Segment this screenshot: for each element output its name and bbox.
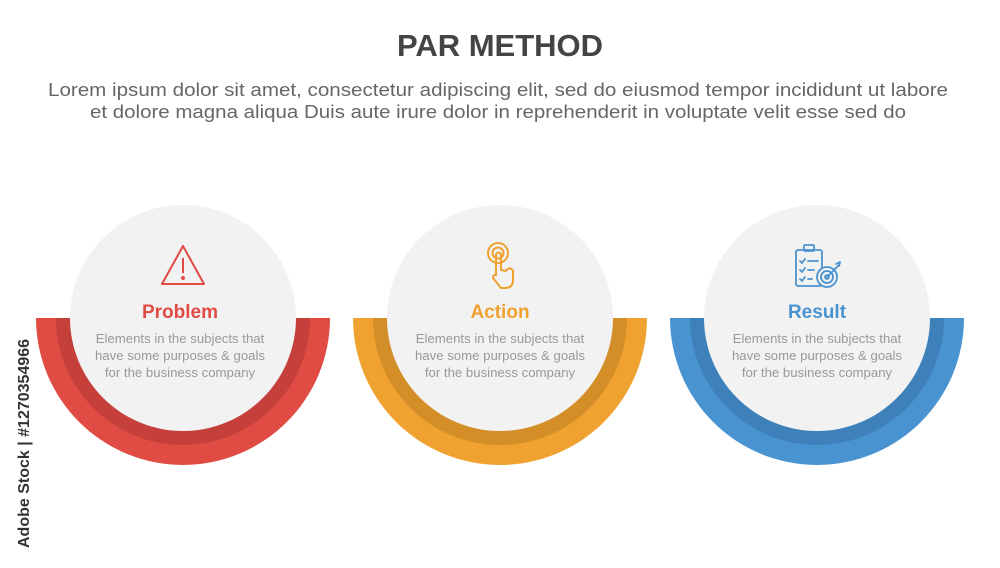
circle: action <box>387 205 613 431</box>
ring: red <box>36 318 330 465</box>
ring: blue <box>670 318 964 465</box>
text: action: for the business company <box>425 365 576 380</box>
subtitle: Lorem ipsum dolor sit amet, consectetur adipiscing elit, sed do eiusmod tempor incididunt ut labore <box>48 79 948 100</box>
text: result: have some purposes & goals <box>732 348 902 363</box>
subtitle: et dolore magna aliqua Duis aute irure dolor in reprehenderit in voluptate velit esse sed do <box>90 101 906 122</box>
text: problem: have some purposes & goals <box>95 348 265 363</box>
icon: warning <box>162 246 204 284</box>
icon: clipboard target <box>796 245 840 287</box>
circle: problem <box>70 205 296 431</box>
text: problem: Elements in the subjects that <box>96 331 265 346</box>
panel: action <box>353 205 647 465</box>
ring: orange <box>353 318 647 465</box>
text: result: Elements in the subjects that <box>733 331 902 346</box>
side watermark text: Adobe Stock | #1270354966 <box>16 339 33 548</box>
text: action: have some purposes & goals <box>415 348 585 363</box>
heading: problem: Problem <box>142 302 218 323</box>
text: action <box>415 331 585 380</box>
text: problem <box>95 331 265 380</box>
panel: problem <box>36 205 330 465</box>
text: problem: for the business company <box>105 365 256 380</box>
circle: result <box>704 205 930 431</box>
subtitle <box>48 79 948 122</box>
text: action: Elements in the subjects that <box>416 331 585 346</box>
text: result: for the business company <box>742 365 893 380</box>
heading: result: Result <box>788 302 847 323</box>
title: PAR METHOD <box>397 28 603 63</box>
icon: hand tap <box>488 243 513 288</box>
text: result <box>732 331 902 380</box>
heading: action: Action <box>470 302 530 323</box>
panel: result <box>670 205 964 465</box>
